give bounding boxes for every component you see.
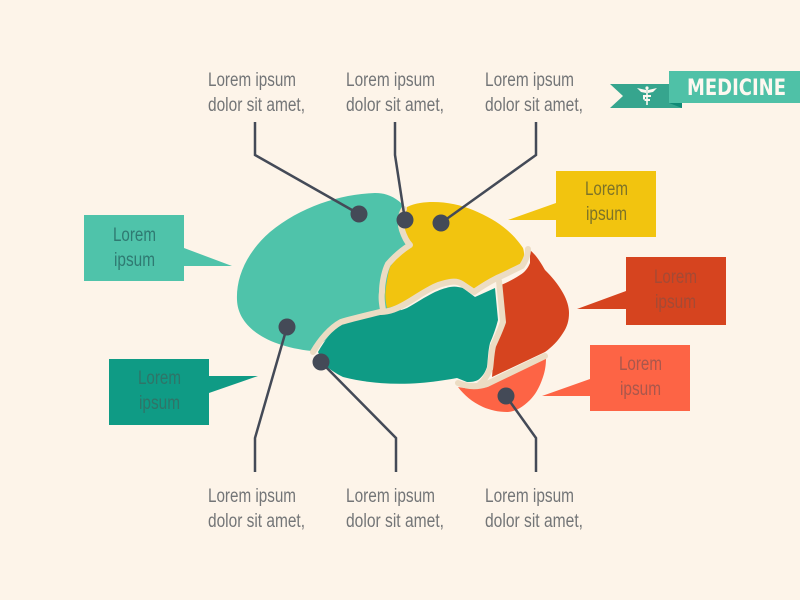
leader dot bbox=[278, 318, 296, 336]
lobe: occipital, red bbox=[492, 250, 569, 377]
brain bbox=[237, 193, 569, 412]
leader dot bbox=[350, 206, 368, 222]
leader dot bbox=[312, 354, 330, 370]
leader line: bottom centre bbox=[312, 354, 396, 472]
callout: red bbox=[577, 257, 726, 325]
callout: yellow: ipsum bbox=[586, 204, 627, 225]
text block: top right: Lorem ipsum bbox=[485, 70, 574, 91]
callout: yellow: Lorem bbox=[585, 179, 628, 200]
text block: top right bbox=[485, 70, 583, 116]
text block: bottom centre: dolor sit amet, bbox=[346, 511, 444, 532]
text block: top left: dolor sit amet, bbox=[208, 95, 305, 116]
text block: bottom left: Lorem ipsum bbox=[208, 486, 296, 507]
callout: light teal bbox=[84, 215, 232, 281]
lobe: frontal, light teal bbox=[237, 193, 412, 351]
leader line: bottom right bbox=[498, 388, 536, 472]
leader line: top centre bbox=[395, 122, 414, 228]
text block: bottom centre: Lorem ipsum bbox=[346, 486, 435, 507]
leader dot bbox=[396, 212, 414, 228]
callout: yellow bbox=[508, 171, 656, 237]
callout: dark teal bbox=[109, 359, 258, 425]
callout: orange bbox=[542, 345, 690, 411]
leader line: top right bbox=[432, 122, 536, 232]
text block: top centre: dolor sit amet, bbox=[346, 95, 444, 116]
leader dot bbox=[498, 388, 514, 404]
text block: bottom centre bbox=[346, 486, 444, 532]
ribbon banner bbox=[669, 71, 800, 103]
text block: bottom left: dolor sit amet, bbox=[208, 511, 305, 532]
callout: dark teal: Lorem bbox=[138, 368, 181, 389]
lobe: temporal, dark teal bbox=[318, 287, 498, 384]
text block: top right: dolor sit amet, bbox=[485, 95, 583, 116]
callout: light teal: ipsum bbox=[114, 250, 155, 271]
text block: top left bbox=[208, 70, 305, 116]
leader line: top left bbox=[255, 122, 368, 222]
leader dot bbox=[432, 214, 450, 232]
text block: top centre bbox=[346, 70, 444, 116]
ribbon tail bbox=[610, 84, 682, 108]
callout: red: Lorem bbox=[654, 267, 697, 288]
leader line: bottom left bbox=[255, 318, 296, 472]
callout: light teal: Lorem bbox=[113, 225, 156, 246]
callout: orange: Lorem bbox=[619, 354, 662, 375]
icon: caduceus bbox=[637, 86, 657, 105]
text block: bottom left bbox=[208, 486, 305, 532]
lobe borders bbox=[313, 209, 545, 386]
callout: dark teal: ipsum bbox=[139, 393, 180, 414]
callout: red: ipsum bbox=[655, 292, 696, 313]
text block: bottom right: Lorem ipsum bbox=[485, 486, 574, 507]
ribbon: medicine bbox=[610, 71, 800, 108]
callout: orange: ipsum bbox=[620, 379, 661, 400]
text block: bottom right: dolor sit amet, bbox=[485, 511, 583, 532]
text block: bottom right bbox=[485, 486, 583, 532]
text block: top centre: Lorem ipsum bbox=[346, 70, 435, 91]
lobe: parietal, yellow bbox=[385, 202, 524, 308]
text block: top left: Lorem ipsum bbox=[208, 70, 296, 91]
lobe: cerebellum, orange bbox=[458, 358, 546, 412]
ribbon fold bbox=[669, 103, 682, 108]
